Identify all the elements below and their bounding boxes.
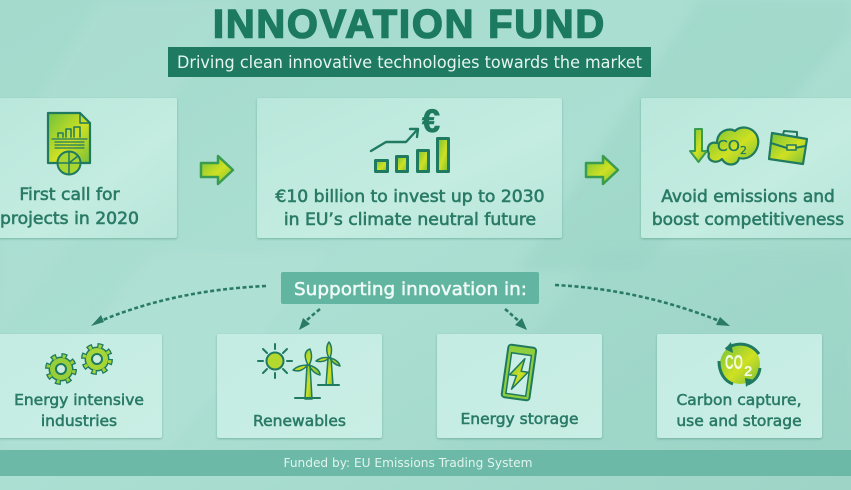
icon: briefcase	[769, 131, 807, 164]
icon: CO2 cycle: CO	[725, 352, 743, 374]
panel: first call: projects in 2020	[0, 209, 139, 229]
panel: avoid emissions	[641, 98, 851, 238]
arrow: to energy intensive	[91, 286, 266, 326]
panel: carbon capture	[657, 334, 822, 438]
subtitle banner	[168, 47, 651, 77]
footer band	[0, 450, 851, 476]
panel: avoid emissions: boost competitiveness	[652, 210, 844, 230]
panel: 10 billion	[257, 98, 562, 238]
supporting banner	[281, 272, 539, 304]
arrow: to renewables	[299, 309, 320, 330]
panel: energy intensive	[0, 334, 162, 438]
icon: sun	[258, 344, 292, 378]
icon: battery	[501, 344, 536, 401]
label: Renewables	[253, 412, 346, 430]
icon: CO2 cloud: 2	[740, 144, 747, 157]
label: €10 billion to invest up to 2030	[275, 187, 545, 207]
title: INNOVATION FUND	[213, 2, 606, 46]
panel: energy intensive: industries	[41, 412, 117, 430]
icon: CO2 cloud: CO	[717, 137, 740, 155]
label: Avoid emissions and	[661, 187, 835, 207]
label: First call for	[19, 185, 121, 205]
arrow: to energy storage	[505, 309, 527, 330]
icon: down arrow	[690, 129, 707, 162]
icon: gears	[48, 346, 110, 382]
panel: 10 billion: in EU’s climate neutral future	[284, 210, 536, 230]
panel: first call	[0, 98, 177, 238]
panel: energy storage	[437, 334, 602, 438]
label: Energy storage	[460, 410, 579, 428]
icon: CO2 cloud	[708, 128, 758, 165]
supporting banner: Supporting innovation in:	[294, 279, 527, 300]
icon: growth bars with euro: €	[422, 103, 440, 139]
icon: CO2 cycle: 2	[744, 363, 752, 380]
label: Carbon capture,	[676, 391, 802, 409]
subtitle banner: Driving clean innovative technologies towards the market	[177, 53, 642, 73]
panel: renewables	[217, 334, 382, 438]
panel: carbon capture: use and storage	[676, 412, 802, 430]
arrow: to carbon capture	[555, 285, 730, 326]
arrow 2	[586, 156, 618, 184]
footer band: Funded by: EU Emissions Trading System	[284, 455, 532, 470]
icon: CO2 cycle	[719, 342, 760, 387]
icon: growth bars with euro	[371, 103, 448, 172]
label: Energy intensive	[14, 391, 144, 409]
arrow 1	[201, 156, 233, 184]
icon: document with charts	[48, 113, 90, 174]
icon: wind turbines	[293, 342, 340, 399]
